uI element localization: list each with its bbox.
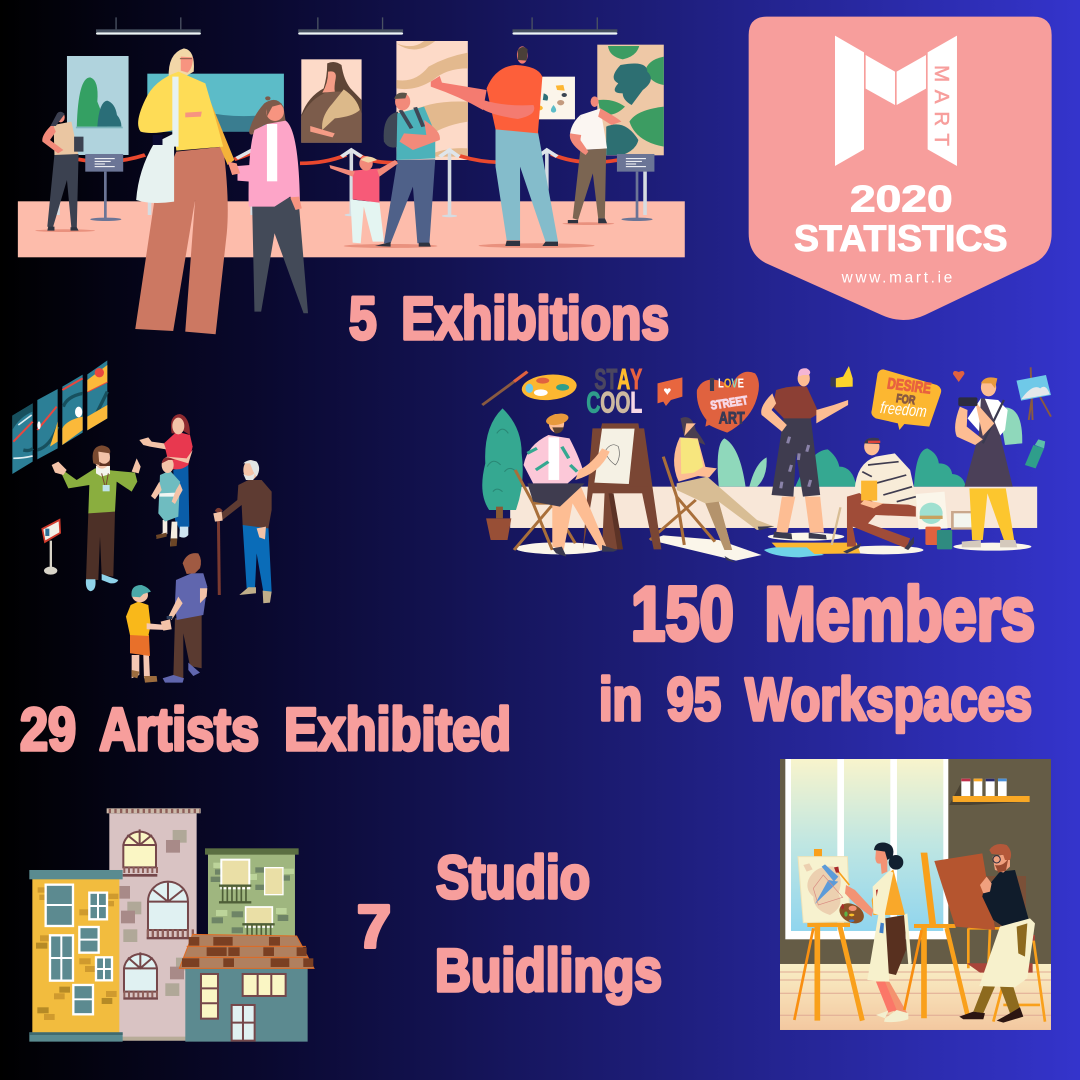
heading: number 7: 7: [357, 893, 391, 960]
yellow building: [29, 870, 123, 1042]
figure: man in purple shirt: [161, 553, 207, 683]
bushes: [718, 438, 966, 487]
illustration: isometric visitors with guide: [12, 360, 272, 683]
rope posts: [58, 150, 645, 217]
shelf with paint jars: [949, 779, 1030, 805]
statistics heading: STATISTICS: [794, 218, 1008, 259]
figure: artist sketching: [524, 412, 617, 557]
paint puddle: [764, 543, 860, 557]
heart bubble: i love street art: I: [709, 375, 715, 395]
like speech bubble: [658, 377, 682, 406]
figure: woman in yellow sweater: [135, 48, 240, 334]
ground shadows: [516, 533, 1031, 561]
figure: photographer: [955, 377, 1022, 547]
back canvas: [934, 853, 995, 930]
figure: standing woman: [761, 368, 848, 539]
lettering: cool: COOL: [586, 386, 642, 419]
figure: woman with tablet: [42, 112, 83, 231]
figure: crouching painter: [832, 438, 918, 553]
middle easel: [904, 853, 968, 1018]
illustration: gallery exhibition scene: [18, 17, 685, 334]
back wall: [510, 487, 1037, 528]
figure: woman painter: [834, 843, 912, 1022]
figure: man painter: [959, 844, 1035, 1023]
potted tree: [482, 408, 523, 540]
wall artwork panels: [12, 360, 107, 474]
figure: backpack visitor: [375, 93, 440, 247]
green building: [205, 848, 299, 938]
window: [785, 759, 948, 939]
figure: woman in red top: [139, 414, 193, 538]
small heart: [953, 371, 964, 382]
spray can: [1025, 439, 1045, 468]
painting: spots: [535, 77, 575, 119]
figure: child with open arms: [329, 156, 398, 243]
figure: man in orange shirt: [431, 46, 558, 246]
illustration: street art members scene: [482, 363, 1051, 563]
painting: portrait: [301, 59, 362, 143]
man's chair and stool: [967, 876, 1045, 1022]
folding chairs: [514, 470, 575, 550]
gallery floor: [18, 201, 685, 257]
figure: girl in pink cardigan: [237, 96, 308, 313]
heart bubble: i love street art: [697, 372, 759, 433]
figure: seated woman: [674, 417, 774, 563]
lettering: stay cool: STAY: [594, 363, 642, 395]
heart bubble: i love street art: ART: [719, 408, 745, 427]
heart bubble: i love street art: LOVE: [718, 376, 744, 390]
heading: 29 artists exhibited: 29 Artists Exhibited: [20, 696, 511, 763]
easel with sketch: [583, 423, 661, 549]
palette: [520, 372, 578, 402]
speech bubble: desire for freedom: FOR: [895, 391, 917, 407]
brush ferrule: [514, 372, 527, 382]
thumbs up icon: [831, 366, 853, 387]
figure: elderly man with cane: [213, 460, 272, 603]
painting: green hill: [67, 56, 129, 155]
rope barriers: [78, 152, 618, 163]
floor shadows: [35, 222, 614, 248]
left easel: [794, 849, 862, 1021]
heart bubble: i love street art: STREET: [709, 393, 749, 412]
painting: teal landscape: [147, 74, 284, 132]
speech bubble: desire for freedom: DESIRE: [886, 375, 932, 397]
info signs: [85, 154, 654, 221]
easel with landscape painting: [1016, 367, 1051, 420]
heading: 5 exhibitions: 5 Exhibitions: [349, 285, 669, 352]
teal house: [179, 934, 314, 1042]
speech bubble: desire for freedom: [871, 369, 941, 430]
wall: [780, 759, 1051, 1030]
illustration: artists painting in studio: [780, 759, 1051, 1030]
M logo: [835, 36, 957, 166]
second chair: [650, 457, 715, 545]
figure: man in white shirt: [568, 96, 621, 223]
heading: studio: Studio: [436, 844, 590, 911]
info sign stand: [41, 518, 61, 575]
painting: abstract waves: [396, 41, 468, 160]
figure: girl in teal dress: [151, 457, 183, 547]
figure: guide in green sweater: [52, 445, 141, 591]
website: www.mart.ie: [841, 270, 952, 287]
ceiling lights: [96, 17, 617, 35]
shield background: [749, 17, 1052, 320]
illustration: studio buildings: [29, 808, 314, 1042]
paint cans: [925, 527, 952, 549]
like speech bubble: ♥: [663, 384, 672, 398]
paintbrush: [482, 382, 514, 405]
pink building: [107, 808, 201, 1041]
painting: monstera leaves: [597, 45, 664, 155]
year: 2020: [850, 178, 953, 219]
speech bubble: desire for freedom: freedom: [879, 398, 928, 421]
heading: buidlings: Buidlings: [435, 937, 662, 1004]
wooden floor: [780, 964, 1051, 1030]
badge: 2020 statistics logo shield: [749, 17, 1052, 320]
small canvases: [916, 492, 975, 530]
figure: boy with cap: [126, 585, 167, 683]
MART vertical label: MART: [930, 65, 953, 146]
